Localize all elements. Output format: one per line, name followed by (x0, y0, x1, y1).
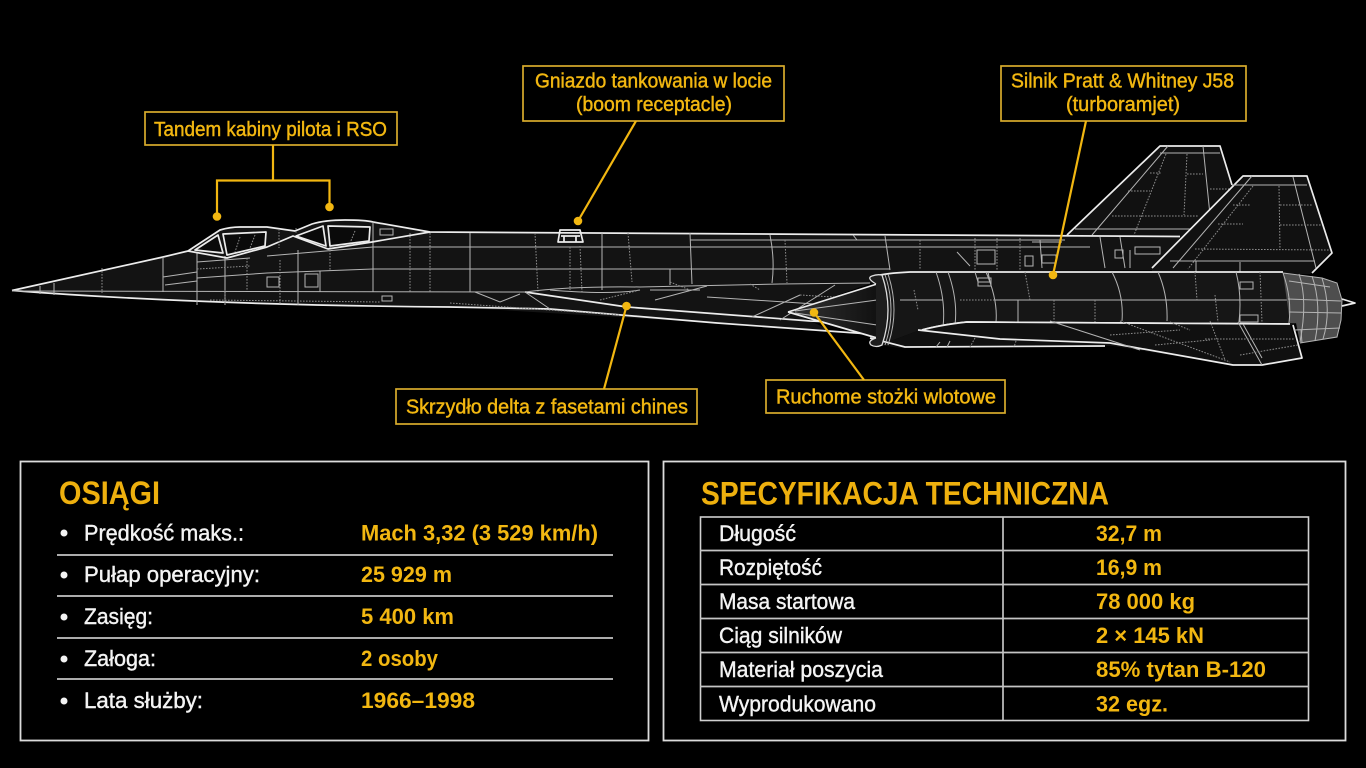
row: length: Długość (719, 521, 796, 546)
outboard wing (870, 321, 1302, 365)
panel: performance (20, 462, 648, 740)
row: years of service: Lata służby: (84, 688, 203, 713)
row: ceiling: Pułap operacyjny: (84, 562, 260, 587)
row: ceiling (60, 562, 452, 587)
row: crew: Załoga: (84, 646, 156, 671)
row: ceiling: 25 929 m (361, 562, 452, 587)
callout: tandem cockpit: Tandem kabiny pilota i RSO (154, 118, 387, 141)
callout: J58 engine (1001, 66, 1246, 279)
row: years of service: 1966–1998 (361, 688, 475, 713)
row: thrust (719, 623, 1204, 648)
row: takeoff mass: Masa startowa (719, 589, 855, 614)
row: produced: 32 egz. (1096, 692, 1168, 716)
engine nozzle (1283, 273, 1355, 343)
row: wingspan: 16,9 m (1096, 555, 1162, 580)
row: thrust: Ciąg silników (719, 623, 843, 648)
row: crew (60, 646, 438, 671)
callout: boom receptacle: Gniazdo tankowania w locie (535, 70, 772, 92)
row: wingspan: Rozpiętość (719, 555, 822, 580)
row: takeoff mass: 78 000 kg (1096, 589, 1195, 614)
callout: inlet cones: Ruchome stożki wlotowe (776, 386, 996, 408)
callout: J58 engine: Silnik Pratt & Whitney J58 (1011, 70, 1234, 92)
row: length (719, 521, 1162, 546)
specification table grid (700, 517, 1309, 720)
row: range: 5 400 km (361, 604, 454, 629)
row: max speed: Mach 3,32 (3 529 km/h) (361, 520, 598, 546)
front vertical tail (1152, 176, 1332, 274)
row: skin material: Materiał poszycia (719, 657, 883, 682)
row: thrust: 2 × 145 kN (1096, 623, 1204, 648)
inlet spike (788, 274, 894, 346)
row: length: 32,7 m (1096, 521, 1162, 546)
row: max speed (60, 520, 598, 546)
engine nacelle (880, 272, 1300, 345)
callout: boom receptacle (523, 66, 784, 225)
row: takeoff mass (719, 589, 1195, 614)
panel: technical specification (664, 462, 1346, 740)
row: wingspan (719, 555, 1162, 580)
row: range: Zasięg: (84, 604, 153, 629)
callout: delta wing (396, 302, 697, 424)
callout: tandem cockpit (145, 112, 397, 221)
row dividers (57, 555, 613, 679)
callout: boom receptacle: (boom receptacle) (576, 93, 732, 116)
row: range (60, 604, 454, 629)
row: skin material: 85% tytan B-120 (1096, 657, 1266, 682)
aircraft blueprint (12, 146, 1355, 365)
cockpit canopies (188, 226, 430, 258)
row: produced (719, 692, 1168, 716)
callout: J58 engine: (turboramjet) (1066, 93, 1180, 116)
row: produced: Wyprodukowano (719, 692, 876, 716)
rear vertical tail (1067, 146, 1232, 238)
heading: performance: OSIĄGI (59, 475, 160, 511)
boom receptacle (558, 230, 583, 242)
row: skin material (719, 657, 1266, 682)
callout: inlet cones (766, 308, 1005, 413)
chine and inner wing (475, 282, 880, 324)
callout: delta wing: Skrzydło delta z fasetami chines (406, 396, 688, 418)
row: years of service (60, 688, 475, 713)
heading: specification: SPECYFIKACJA TECHNICZNA (701, 476, 1109, 512)
row: max speed: Prędkość maks.: (84, 520, 244, 546)
row: crew: 2 osoby (361, 646, 438, 671)
fuselage (12, 220, 1180, 334)
